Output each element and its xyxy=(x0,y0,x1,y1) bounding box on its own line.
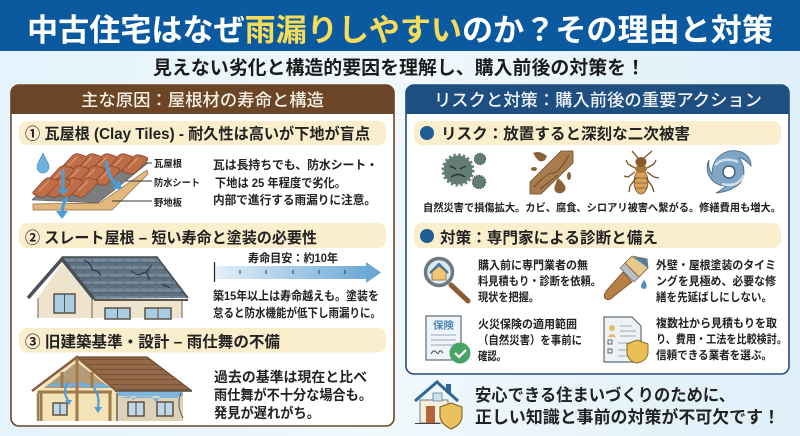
text: compare contractors xyxy=(656,316,787,362)
illustration: slate roof house xyxy=(28,257,190,319)
footer message xyxy=(475,386,780,427)
risk caption: 自然災害で損傷拡大。カビ、腐食、シロアリ被害へ繋がる。修繕費用も増大。 xyxy=(423,201,781,214)
icon: rotten wood xyxy=(530,151,573,194)
text: clay tile explanation: 下地は 25 年程度で劣化。 xyxy=(215,175,346,190)
title banner: 中古住宅はなぜ雨漏りしやすいのか？その理由と対策 xyxy=(27,13,773,48)
text: free inspection: 現状を把握。 xyxy=(478,290,539,304)
text: painting timing: ングを見極め、必要な修 xyxy=(656,274,776,288)
footer message: 正しい知識と事前の対策が不可欠です！ xyxy=(475,407,780,427)
text: old standards explanation: 発見が遅れがち。 xyxy=(214,405,320,421)
text: old standards explanation: 過去の基準は現在と比べ xyxy=(214,369,367,385)
layer leader lines xyxy=(112,163,152,201)
section heading 3: ③ 旧建築基準・設計 – 雨仕舞の不備 xyxy=(25,332,280,351)
text: free inspection: 料見積もり・診断を依頼。 xyxy=(478,274,601,288)
icon: insurance document xyxy=(426,316,470,364)
icon: insurance document: 保険 xyxy=(433,319,454,332)
text: old standards explanation: 雨仕舞が不十分な場合も。 xyxy=(214,387,372,403)
text: painting timing: 繕を先延ばしにしない。 xyxy=(656,290,772,304)
subtitle: 見えない劣化と構造的要因を理解し、購入前後の対策を！ xyxy=(153,57,645,79)
text: painting timing: 外壁・屋根塗装のタイミ xyxy=(656,258,776,272)
panel: risks and countermeasures xyxy=(406,85,789,374)
text: clay tile explanation: 瓦は長持ちでも、防水シート・ xyxy=(213,157,378,172)
panel heading: causes: 主な原因：屋根材の寿命と構造 xyxy=(81,91,324,110)
text: slate explanation: 築15年以上は寿命越えも。塗装を xyxy=(213,288,379,303)
text: fire insurance: （自然災害）を事前に xyxy=(478,333,582,347)
title banner xyxy=(0,0,800,51)
text: old standards explanation xyxy=(214,369,372,421)
text: clay tile explanation xyxy=(213,157,378,207)
section heading 2: ② スレート屋根 – 短い寿命と塗装の必要性 xyxy=(25,228,317,247)
text: compare contractors: 信頼できる業者を選ぶ。 xyxy=(656,348,772,362)
layer labels xyxy=(154,158,200,209)
section heading: risk xyxy=(414,121,781,145)
illustration: clay tile roof layers xyxy=(32,153,152,219)
text: fire insurance: 火災保険の適用範囲 xyxy=(478,317,577,331)
icon: magnifier house xyxy=(426,258,468,301)
text: painting timing xyxy=(656,258,776,304)
icon: house with shield xyxy=(415,382,462,429)
footer message: 安心できる住まいづくりのために、 xyxy=(475,386,735,405)
icon: typhoon xyxy=(707,151,751,193)
icon: water drop xyxy=(37,153,49,173)
icon: mold xyxy=(444,154,486,188)
section heading 1: ① 瓦屋根 (Clay Tiles) - 耐久性は高いが下地が盲点 xyxy=(25,124,370,143)
text: fire insurance xyxy=(478,317,582,363)
icon: paint brush xyxy=(604,256,648,300)
section heading 2 xyxy=(19,223,386,248)
layer labels: 瓦屋根 xyxy=(154,158,182,170)
water arrows xyxy=(56,161,122,219)
layer labels: 防水シート xyxy=(154,177,200,189)
section heading 1 xyxy=(19,121,386,145)
section heading: countermeasures: 対策：専門家による診断と備え xyxy=(440,228,658,247)
text: compare contractors: 複数社から見積もりを取 xyxy=(656,316,777,330)
chart: lifespan timeline arrow: 寿命目安：約10年 xyxy=(248,251,338,265)
panel heading: risks: リスクと対策：購入前後の重要アクション xyxy=(434,91,762,110)
layer labels: 野地板 xyxy=(154,197,182,209)
icon: document with shield xyxy=(604,317,648,363)
text: slate explanation xyxy=(213,288,381,320)
chart: lifespan timeline arrow xyxy=(214,251,381,283)
text: free inspection xyxy=(478,258,601,304)
section heading: risk: リスク：放置すると深刻な二次被害 xyxy=(441,124,690,143)
text: slate explanation: 怠ると防水機能が低下し雨漏りに。 xyxy=(213,305,381,320)
section heading 3 xyxy=(19,328,386,352)
text: clay tile explanation: 内部で進行する雨漏りに注意。 xyxy=(213,192,376,207)
text: fire insurance: 確認。 xyxy=(478,349,506,363)
text: free inspection: 購入前に専門業者の無 xyxy=(478,258,588,272)
section heading: countermeasures xyxy=(414,223,781,248)
icon: termite xyxy=(624,151,659,194)
panel: main causes xyxy=(11,85,394,426)
illustration: old house with leak xyxy=(32,357,200,421)
